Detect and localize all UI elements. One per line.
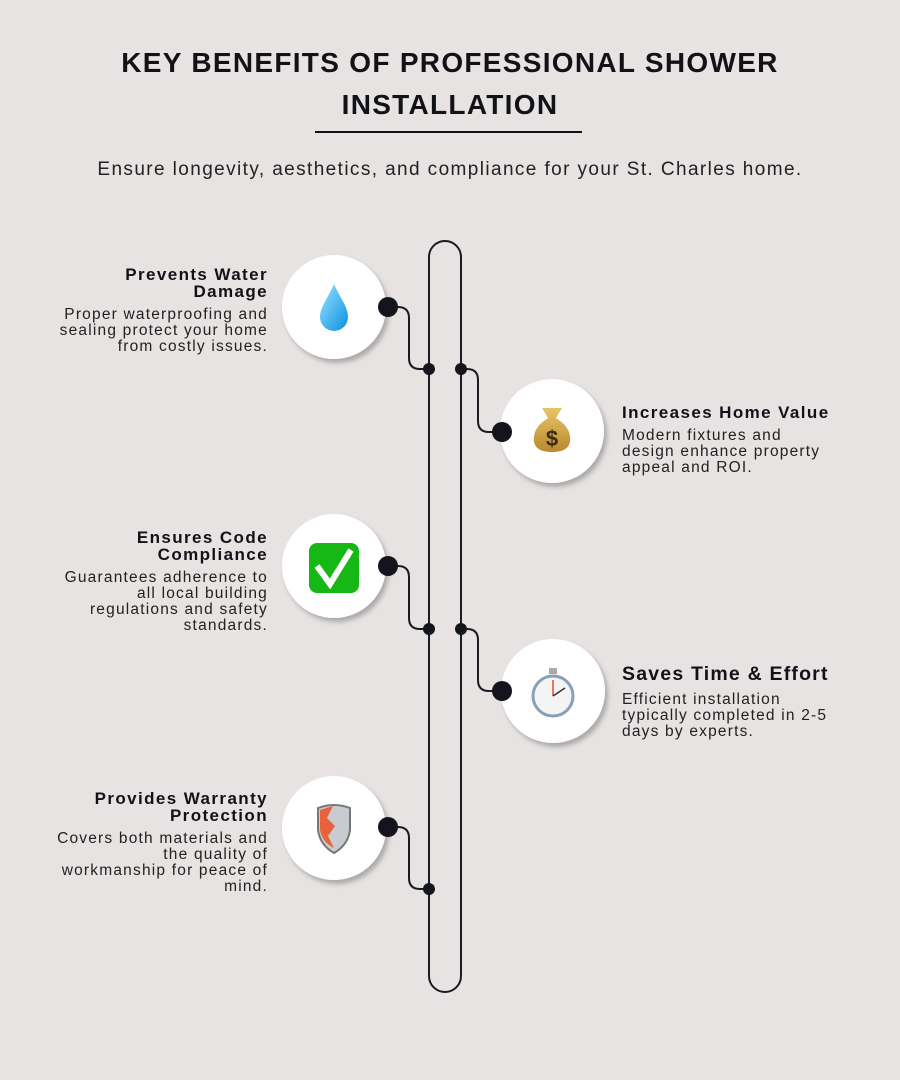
item: code compliance: regulations and safety: [90, 601, 268, 618]
title: INSTALLATION: [342, 89, 558, 120]
item: prevents water damage: Damage: [193, 282, 268, 301]
item: prevents water damage: Proper waterproofing and: [64, 306, 268, 323]
icon circle: shield: [282, 776, 398, 880]
item: warranty: [57, 789, 268, 895]
item: code compliance: standards.: [184, 617, 268, 634]
item: increases home value: Increases Home Value: [622, 403, 830, 422]
item: prevents water damage: [60, 265, 268, 355]
item: code compliance: Guarantees adherence to: [65, 569, 268, 586]
item: saves time: Saves Time & Effort: [622, 663, 829, 685]
item: warranty: Protection: [170, 806, 268, 825]
item: code compliance: Ensures Code: [137, 528, 268, 547]
item: saves time: days by experts.: [622, 723, 754, 740]
central pill: [429, 241, 461, 992]
item: saves time: Efficient installation: [622, 691, 781, 708]
item: increases home value: Modern fixtures and: [622, 427, 782, 444]
item: warranty: mind.: [224, 878, 268, 895]
item: saves time: [622, 663, 829, 740]
item: code compliance: all local building: [137, 585, 268, 602]
item: warranty: workmanship for peace of: [62, 862, 268, 879]
item: prevents water damage: Prevents Water: [125, 265, 268, 284]
item: prevents water damage: sealing protect your home: [60, 322, 268, 339]
title: KEY BENEFITS OF PROFESSIONAL SHOWER: [121, 47, 779, 78]
title: [121, 47, 779, 120]
item: code compliance: Compliance: [158, 545, 268, 564]
icon circle: money bag: $: [546, 426, 558, 451]
item: code compliance: [65, 528, 268, 634]
icon circle: check mark: [282, 514, 398, 618]
item: warranty: Provides Warranty: [95, 789, 268, 808]
item: increases home value: design enhance property: [622, 443, 820, 460]
connectors: [388, 307, 502, 889]
item: warranty: the quality of: [163, 846, 268, 863]
icon circle: money bag: [492, 379, 604, 483]
item: warranty: Covers both materials and: [57, 830, 268, 847]
item: saves time: typically completed in 2-5: [622, 707, 827, 724]
item: prevents water damage: from costly issues.: [118, 338, 268, 355]
icon circle: stopwatch: [492, 639, 605, 743]
item: increases home value: [622, 403, 830, 476]
subtitle: Ensure longevity, aesthetics, and compliance for your St. Charles home.: [97, 159, 803, 180]
item: increases home value: appeal and ROI.: [622, 459, 753, 476]
icon circle: water drop: [282, 255, 398, 359]
